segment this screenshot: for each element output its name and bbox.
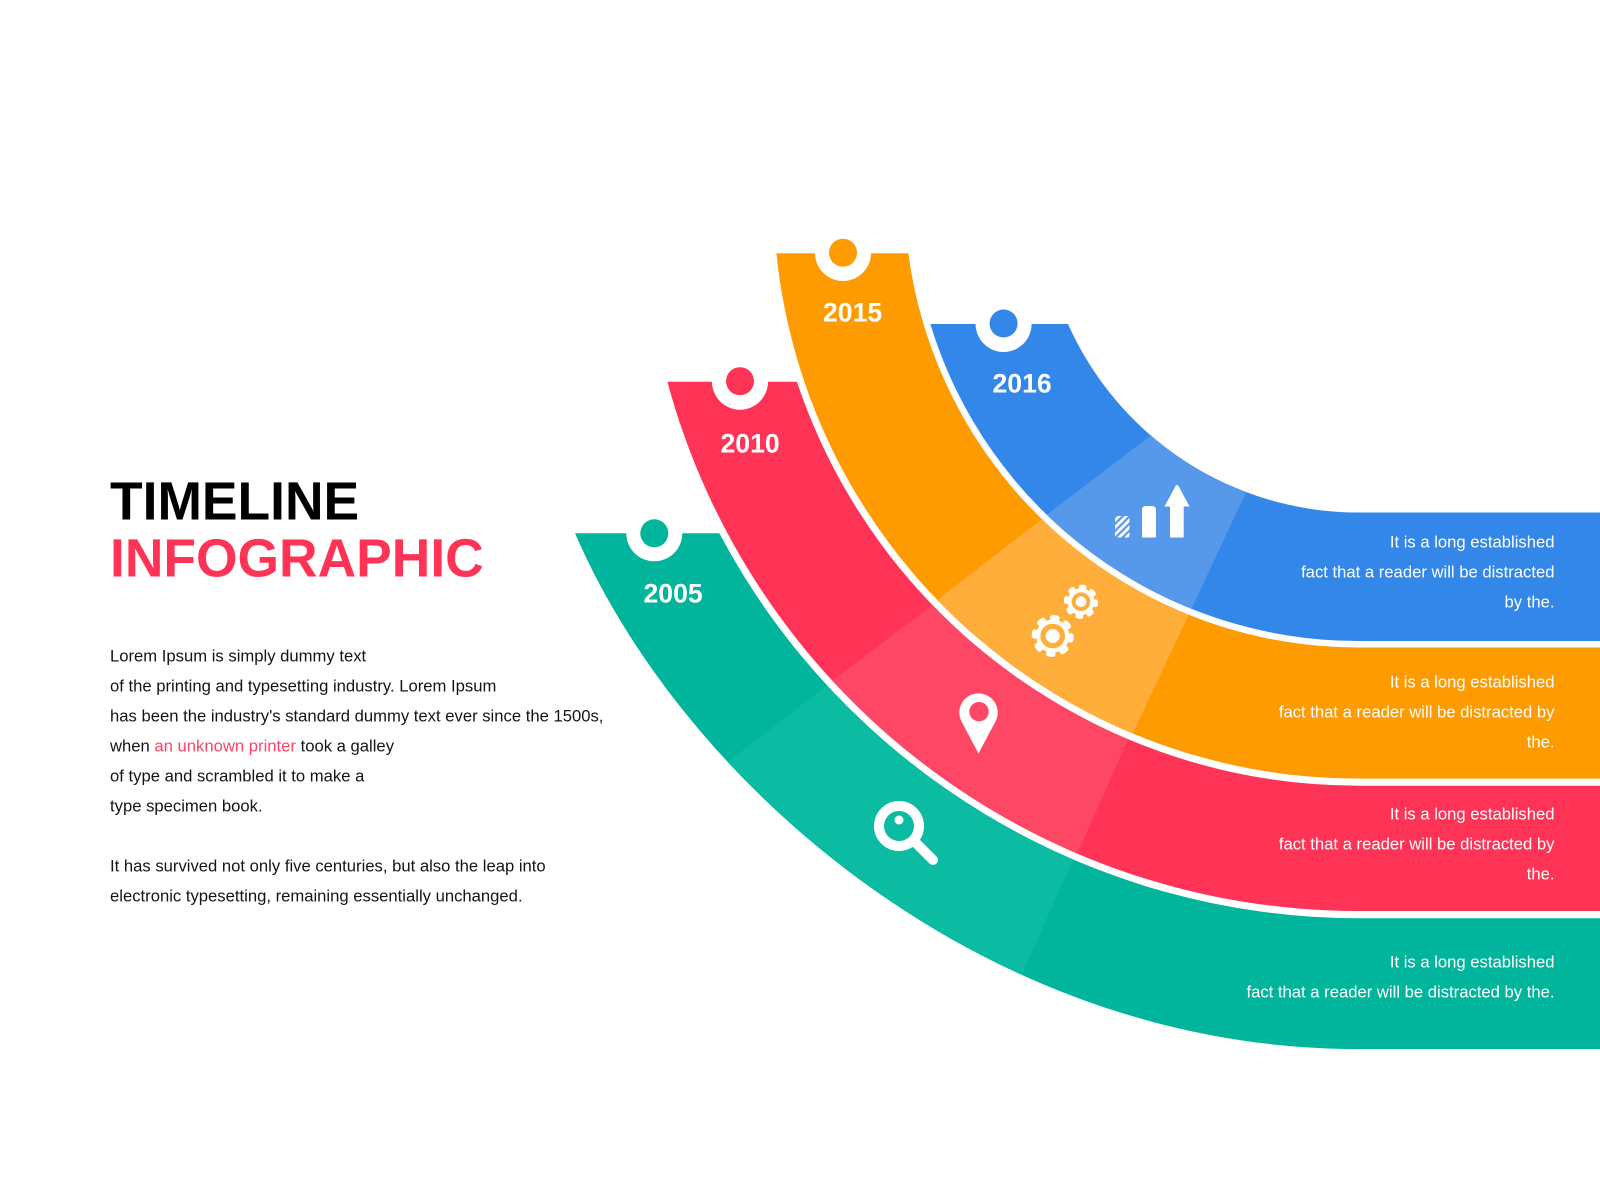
highlighted segment xyxy=(1047,436,1246,609)
intro text block: electronic typesetting, remaining essentially unchanged. xyxy=(110,886,523,906)
description xyxy=(1279,804,1555,884)
band shape xyxy=(575,533,1600,1049)
intro text block: type specimen book. xyxy=(110,796,263,816)
icon: magnifier xyxy=(879,806,933,860)
band shape xyxy=(667,382,1600,911)
intro text block: of the printing and typesetting industry. Lorem Ipsum xyxy=(110,676,496,696)
title line: timeline: TIMELINE xyxy=(110,472,359,532)
description xyxy=(1279,672,1555,752)
intro text block: It has survived not only five centuries, but also the leap into xyxy=(110,856,546,876)
notch xyxy=(976,296,1032,352)
highlighted segment xyxy=(832,605,1128,854)
marker dot xyxy=(829,239,857,267)
description: fact that a reader will be distracted by xyxy=(1279,702,1555,722)
title line: infographic: INFOGRAPHIC xyxy=(110,530,484,588)
band shape xyxy=(776,253,1600,779)
description: fact that a reader will be distracted by xyxy=(1279,834,1555,854)
year: 2015 xyxy=(823,298,882,328)
intro text block: Lorem Ipsum is simply dummy text xyxy=(110,646,367,666)
icon: location pin xyxy=(959,693,998,754)
highlighted segment xyxy=(937,519,1189,734)
description: the. xyxy=(1527,864,1554,884)
description: It is a long established xyxy=(1390,532,1554,552)
description: fact that a reader will be distracted xyxy=(1301,562,1554,582)
notch xyxy=(626,505,682,561)
notch xyxy=(712,354,768,410)
year: 2010 xyxy=(720,428,780,458)
notch xyxy=(815,225,871,281)
marker dot xyxy=(990,310,1018,338)
intro text block: when an unknown printer took a galley xyxy=(109,736,395,756)
title xyxy=(110,472,484,588)
year: 2016 xyxy=(992,368,1052,398)
icon: gears xyxy=(1034,587,1096,654)
panel: 2005 teal band xyxy=(575,505,1600,1049)
description: fact that a reader will be distracted by the. xyxy=(1246,982,1554,1002)
band shape xyxy=(930,324,1600,641)
marker dot xyxy=(726,367,754,395)
year: 2005 xyxy=(644,578,703,608)
panel: 2010 red band xyxy=(667,354,1600,911)
description: the. xyxy=(1527,732,1554,752)
icon: growth chart xyxy=(1115,485,1190,538)
intro text block xyxy=(109,646,603,906)
intro text block: of type and scrambled it to make a xyxy=(110,766,365,786)
panel: 2016 blue band xyxy=(930,296,1600,641)
description: It is a long established xyxy=(1390,952,1554,972)
intro text block: has been the industry's standard dummy text ever since the 1500s, xyxy=(110,706,603,726)
description xyxy=(1301,532,1554,612)
panel: 2015 orange band xyxy=(776,225,1600,779)
description xyxy=(1246,952,1554,1002)
description: by the. xyxy=(1505,592,1554,612)
marker dot xyxy=(640,519,668,547)
description: It is a long established xyxy=(1390,804,1554,824)
description: It is a long established xyxy=(1390,672,1554,692)
highlighted segment xyxy=(728,686,1073,975)
